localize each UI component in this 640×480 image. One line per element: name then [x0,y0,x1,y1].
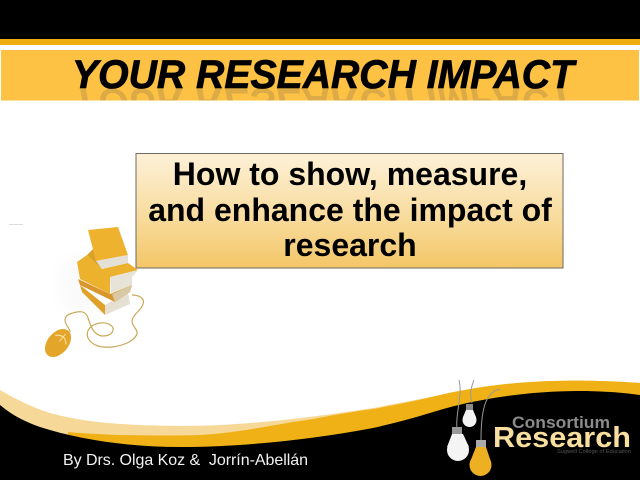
bulb cords [457,380,500,440]
icon: stack of books with mouse [40,227,143,362]
book 3 [77,255,138,294]
book 2 back [87,249,102,269]
subtitle line 2: and enhance the impact of [148,192,552,228]
mouse [40,324,76,362]
logo: Consortium Research [447,380,631,476]
subtitle box [136,154,563,268]
icon: small white bulb [462,404,476,427]
book 4 [78,279,132,302]
author credit: By Drs. Olga Koz & Jorrín-Abellán [63,452,308,469]
logo tagline: Sugwell College of Education [557,449,631,455]
decorative small dash [9,224,23,225]
logo word Research: Research [493,422,631,454]
gold rule [0,39,640,45]
icon: gold bulb [470,440,492,476]
title reflection: YOUR RESEARCH IMPACT [72,80,577,124]
mouse cable [65,295,143,347]
title: YOUR RESEARCH IMPACT [72,53,577,97]
top black band [0,0,640,39]
icon: large white bulb [447,427,469,461]
book 1 top [88,227,128,261]
book 5 bottom [80,285,105,315]
footer swoosh [0,381,640,480]
title banner [1,50,639,100]
subtitle line 1: How to show, measure, [173,156,527,192]
subtitle line 3: research [283,227,417,263]
logo word Consortium: Consortium [512,413,610,432]
